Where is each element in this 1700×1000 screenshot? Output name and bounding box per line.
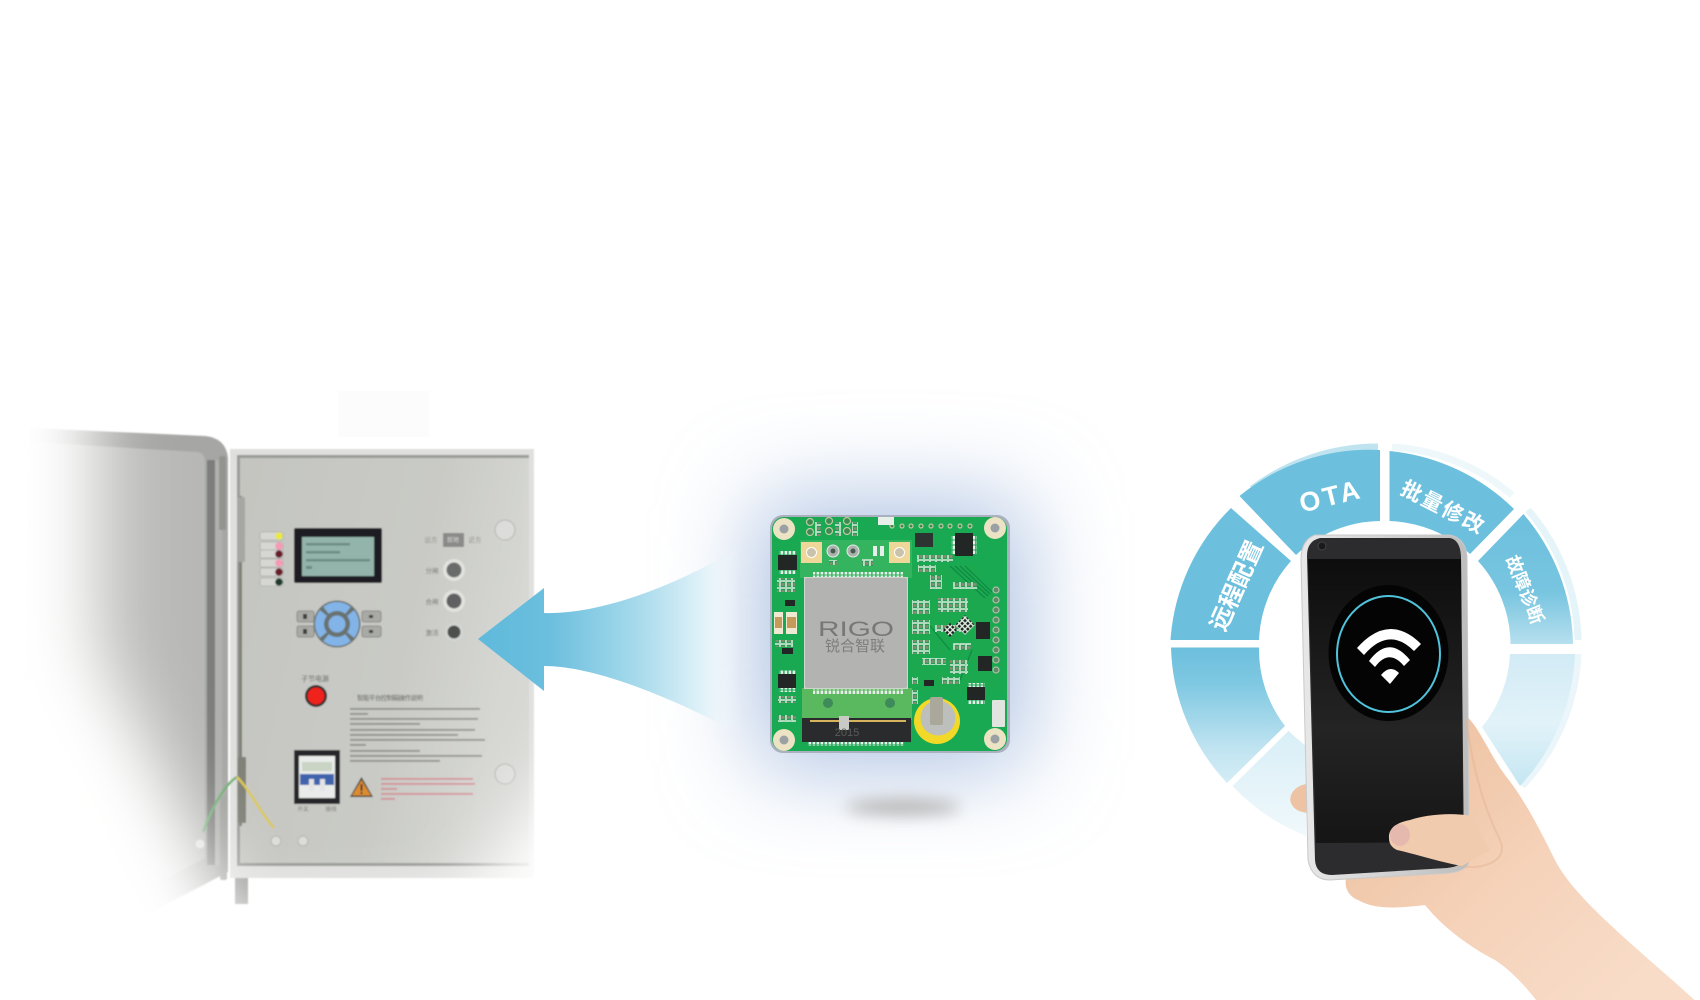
circuit board <box>770 515 1010 753</box>
floor shadow under circuit board <box>845 799 961 815</box>
thumbnail <box>1390 824 1410 846</box>
coin battery <box>914 697 960 744</box>
segment: lower right <box>1482 654 1575 786</box>
cabinet body and inner panel <box>230 449 534 878</box>
label: remote configuration: 远程配置 <box>1205 537 1269 635</box>
black chips <box>778 533 992 700</box>
wifi icon <box>1357 629 1421 684</box>
right pin row <box>993 587 999 673</box>
panel screws <box>195 520 515 849</box>
camera <box>1318 542 1326 550</box>
ground wires <box>203 777 274 832</box>
ring highlights <box>1252 447 1578 786</box>
hand crease shading <box>1462 720 1502 867</box>
selector and knobs: 就地 <box>447 536 459 544</box>
segment: batch edit <box>1390 451 1514 554</box>
selector and knobs: 激活 <box>426 628 439 637</box>
selector and knobs: 分闸 <box>426 566 438 575</box>
clear case <box>1301 535 1469 880</box>
segment: fault diagnosis <box>1478 514 1573 644</box>
red emergency button <box>301 674 329 707</box>
chip legs <box>779 536 985 704</box>
arrow pointing to cabinet <box>478 547 740 734</box>
white side connector <box>992 700 1005 727</box>
top pin row <box>806 518 972 536</box>
black wifi disc <box>1328 585 1448 721</box>
board outline <box>770 515 1010 753</box>
smartphone <box>1301 535 1469 880</box>
circuit breaker: 开关 <box>297 805 309 813</box>
small components <box>775 555 977 722</box>
green PCB <box>772 517 1007 751</box>
circuit breaker: 接线 <box>325 805 337 813</box>
red emergency button: 子节电源 <box>301 674 329 683</box>
label: fault diagnosis: 故障诊断 <box>1502 552 1548 627</box>
selector and knobs: 合闸 <box>426 597 438 606</box>
label: batch edit: 批量修改 <box>1397 477 1489 539</box>
faint box above the cabinet <box>338 391 429 437</box>
pads between top pins <box>815 522 858 536</box>
screen <box>1308 559 1463 843</box>
cyan ring <box>1337 596 1440 712</box>
segment: bottom <box>1232 731 1306 836</box>
segment: OTA <box>1240 450 1380 555</box>
metal module with RIGO logo <box>804 572 908 694</box>
tantalum capacitors <box>774 612 797 634</box>
selector and knobs: 远方 <box>424 535 438 544</box>
LCD display <box>294 528 382 583</box>
logo: RIGO: RIGO <box>818 618 894 641</box>
hand holding phone <box>1290 535 1700 1000</box>
LED indicator column <box>260 532 283 586</box>
palm and wrist <box>1346 716 1700 1000</box>
fingertip left of phone <box>1290 784 1308 813</box>
instruction text block <box>350 693 485 762</box>
instruction text block: 智能平台控制箱操作说明 <box>357 693 424 702</box>
thumb <box>1389 814 1490 866</box>
segment: remote configuration <box>1170 508 1291 640</box>
selector and knobs: 近方 <box>468 535 482 544</box>
red warning text lines <box>381 778 475 800</box>
label: OTA: OTA <box>1296 474 1366 519</box>
gold antenna pads and connectors <box>801 542 910 566</box>
app feature ring <box>1170 447 1578 836</box>
warning triangle <box>350 777 373 797</box>
M.2 connector: 2015 <box>835 727 859 739</box>
blue glow behind circuit board <box>755 500 1025 768</box>
carrier area around module <box>800 540 912 578</box>
segment: lower left <box>1171 648 1285 783</box>
selector and knobs <box>424 533 482 641</box>
M.2 connector <box>802 716 911 746</box>
cabinet foot <box>235 874 248 904</box>
photo: electrical control cabinet <box>52 430 534 905</box>
keypad <box>297 600 381 648</box>
mounting holes <box>773 517 1006 751</box>
cabinet door, open <box>52 430 229 897</box>
phone body <box>1307 538 1464 875</box>
circuit breaker <box>294 750 340 813</box>
logo: company name: 锐合智联 <box>825 637 885 655</box>
